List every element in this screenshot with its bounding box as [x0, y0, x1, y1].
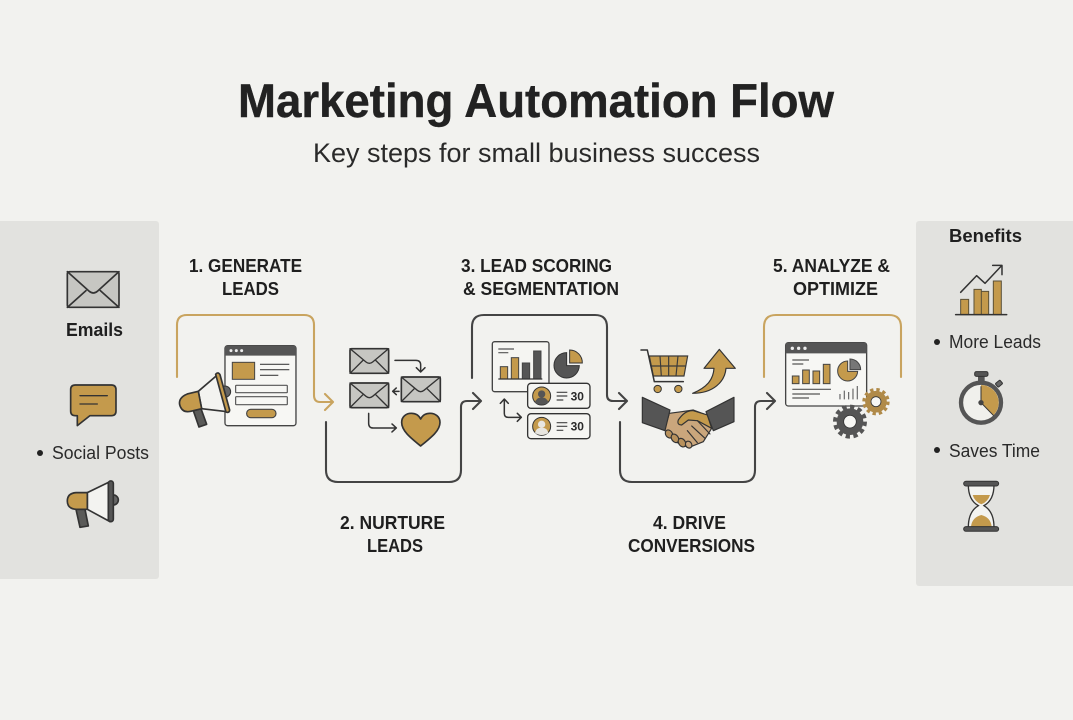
icon: step 3 scoring dashboard [492, 342, 590, 439]
arrow: step 3 flow [472, 315, 627, 409]
step 5 heading: OPTIMIZE [793, 279, 878, 299]
gear: large [835, 407, 865, 437]
step 5 heading [773, 256, 890, 299]
step 2 heading: LEADS [367, 536, 423, 556]
step 1 heading [189, 256, 302, 299]
icon: email envelope [67, 272, 119, 307]
gear: small [864, 390, 888, 414]
step 4 heading [628, 513, 755, 556]
label: Saves Time: Saves Time [949, 441, 1040, 461]
step 5 heading: 5. ANALYZE & [773, 256, 890, 276]
heading: Benefits: Benefits [949, 225, 1022, 246]
step 1 heading: 1. GENERATE [189, 256, 302, 276]
arrow: step 2 flow [326, 393, 481, 482]
step 2 heading: 2. NURTURE [340, 513, 445, 533]
step 2 heading [340, 513, 445, 556]
title: Marketing Automation Flow [238, 75, 835, 128]
icon: step 5 analytics window and gears [786, 343, 888, 437]
icon: step 4 cart, arrow and handshake [641, 349, 735, 449]
step 3 heading [461, 256, 619, 299]
icon: hourglass [964, 481, 999, 531]
label: More Leads: More Leads [949, 332, 1041, 352]
panel: inputs [0, 221, 159, 579]
icon: growth chart [956, 265, 1007, 315]
step 1 heading: LEADS [222, 279, 279, 299]
step 4 heading: CONVERSIONS [628, 536, 755, 556]
icon: stopwatch [961, 372, 1003, 423]
label: Social Posts: Social Posts [52, 443, 149, 463]
step 4 heading: 4. DRIVE [653, 513, 726, 533]
arrow: step 5 bracket [764, 315, 901, 377]
score row 1: 30 [571, 389, 584, 403]
icon: step 2 email sequence and heart [350, 349, 440, 446]
arrow: step 4 flow [620, 393, 775, 482]
score row 2: 30 [571, 419, 584, 433]
panel: benefits [916, 221, 1073, 586]
arrow: step 1 flow [177, 315, 333, 410]
icon: step 1 landing page and megaphone [179, 346, 296, 427]
icon: megaphone [67, 481, 118, 527]
icon: chat bubble [71, 385, 116, 426]
label: Emails: Emails [66, 319, 123, 340]
subtitle: Key steps for small business success [313, 138, 760, 168]
step 3 heading: 3. LEAD SCORING [461, 256, 612, 276]
step 3 heading: & SEGMENTATION [463, 279, 619, 299]
